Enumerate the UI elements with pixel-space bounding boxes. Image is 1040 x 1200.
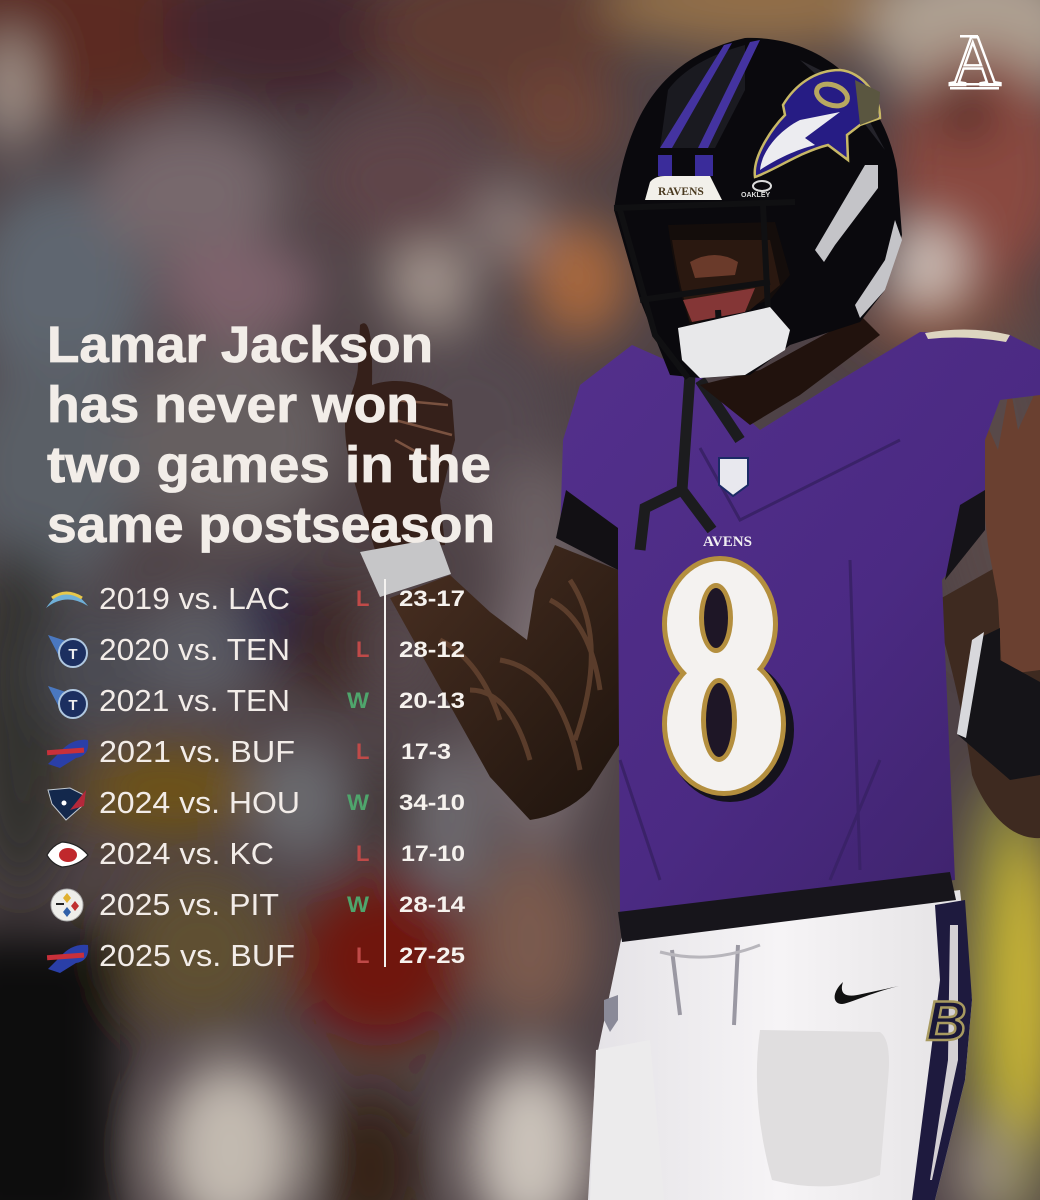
wristband [360,538,451,597]
row: 2019 vs. LAC: L [356,586,369,611]
title: two games in the [47,436,491,493]
title: Lamar Jackson [47,316,433,373]
face mask [614,202,795,378]
row: 2024 vs. KC: L [356,841,369,866]
row: 2020 vs. TEN: 28-12 [399,637,465,662]
oakley badge: OAKLEY [741,192,770,199]
icon: titans [48,635,87,667]
row: 2020 vs. TEN: L [356,637,369,662]
row: 2025 vs. BUF: 27-25 [399,943,465,968]
row: 2024 vs. KC: 17-10 [401,841,465,866]
row: 2024 vs. HOU [48,786,465,820]
jersey waist band [618,872,956,942]
helmet shine [800,60,885,150]
player: Lamar Jackson [345,38,1040,1200]
row: 2021 vs. BUF: L [356,739,369,764]
row: 2024 vs. KC [47,837,465,871]
front helmet plate [645,176,722,200]
title [47,316,495,553]
icon: titans: T [68,697,78,714]
icon: nike swoosh [835,982,899,1004]
row: 2021 vs. TEN: W [347,688,369,713]
hand with raised finger [345,323,455,550]
row: 2024 vs. KC: 2024 vs. KC [99,837,274,871]
row: 2021 vs. TEN: 2021 vs. TEN [99,684,290,718]
icon: texans [48,788,86,820]
jersey [556,329,1040,942]
row: 2025 vs. BUF [47,939,465,973]
row: 2021 vs. BUF: 17-3 [401,739,451,764]
row: 2019 vs. LAC: 23-17 [399,586,465,611]
icon: bills [47,740,88,768]
icon: steelers [51,889,83,921]
row: 2025 vs. BUF: L [356,943,369,968]
row: 2025 vs. PIT: 28-14 [399,892,466,917]
icon: titans [48,686,87,718]
NFL shield [719,458,748,496]
helmet stripes [660,40,760,148]
row: 2025 vs. PIT: 2025 vs. PIT [99,888,279,922]
row: 2024 vs. HOU: 34-10 [399,790,465,815]
row: 2021 vs. BUF [47,735,451,769]
row: 2020 vs. TEN [48,633,465,667]
row: 2020 vs. TEN: 2020 vs. TEN [99,633,290,667]
face [668,222,790,325]
row: 2024 vs. HOU: W [347,790,369,815]
chin strap [640,375,740,550]
row: 2025 vs. PIT [51,888,466,922]
arm tattoos [440,580,600,770]
neck [700,315,880,425]
row: 2021 vs. TEN [48,684,465,718]
row: 2025 vs. BUF: 2025 vs. BUF [99,939,295,973]
helmet silver clip [815,165,902,318]
pants [588,890,972,1200]
divider line [384,579,386,967]
title: has never won [47,376,419,433]
pants B logo: B [926,989,966,1052]
jersey number 8 [662,556,794,802]
left arm [390,545,636,820]
icon: chiefs arrowhead [47,842,88,867]
shield logo on pants [604,995,618,1032]
results table [46,579,466,973]
row: 2021 vs. BUF: 2021 vs. BUF [99,735,295,769]
helmet [614,38,902,378]
right arm [938,565,1040,838]
icon: titans: T [68,646,78,663]
title: same postseason [47,496,495,553]
black arm sleeve [958,628,1040,780]
chin guard [678,307,790,378]
helmet wordmark: RAVENS [658,186,704,198]
row: 2025 vs. PIT: W [347,892,369,917]
logo: The Athletic A: A [949,21,1001,101]
jersey wordmark: AVENS [703,534,752,550]
jersey shoulder trim [925,329,1010,342]
black sleeve cuff [556,490,618,570]
row: 2024 vs. HOU: 2024 vs. HOU [99,786,300,820]
row: 2019 vs. LAC [46,582,465,616]
icon: bills [47,945,88,973]
row: 2019 vs. LAC: 2019 vs. LAC [99,582,290,616]
right hand [982,382,1040,675]
ravens logo on helmet [755,70,880,177]
row: 2021 vs. TEN: 20-13 [399,688,465,713]
icon: chargers bolt [46,592,88,608]
helmet shine panel [660,45,745,148]
